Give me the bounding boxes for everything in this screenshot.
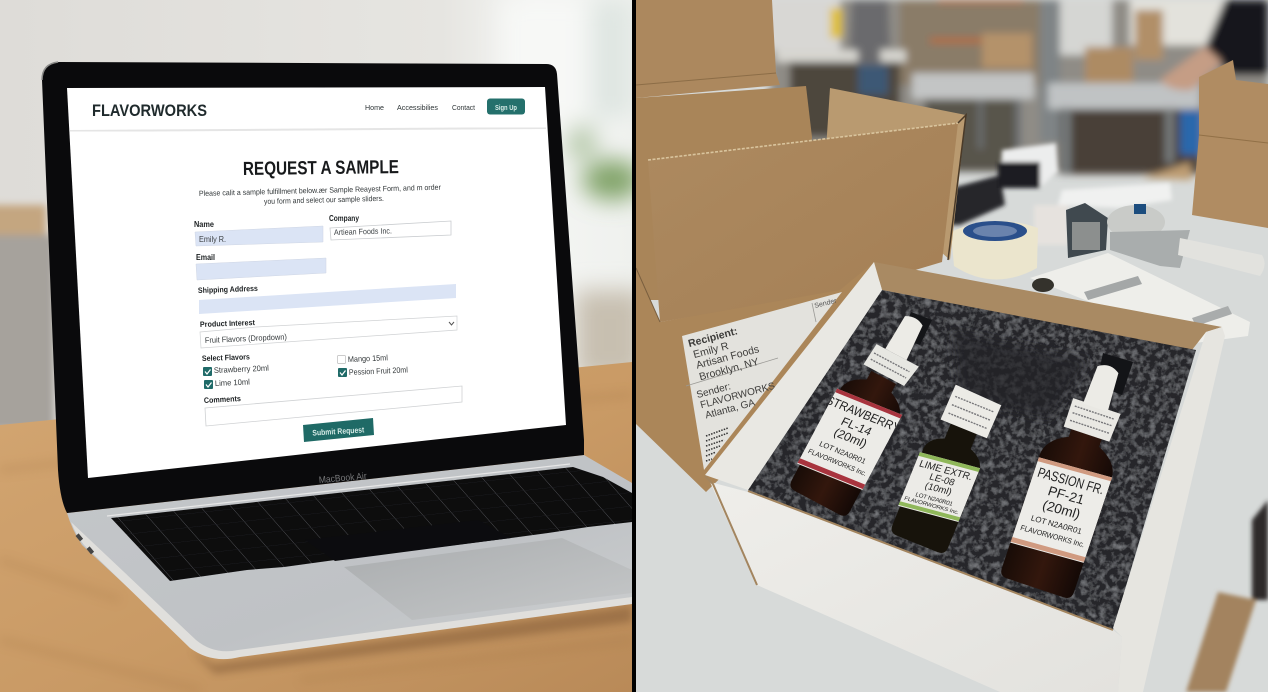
front face [710,482,1122,692]
warehouse background [636,0,1268,692]
comments field [204,386,462,426]
nav links: Home [365,103,384,112]
open carton with front flap [636,115,966,492]
product interest dropdown [200,316,457,348]
label: strawberry [793,387,907,492]
label: lime extract: LOT N2A0R01 [914,492,954,508]
laptop lid [42,62,584,513]
comments field: Comments [204,394,242,405]
shipping address field: Shipping Address [198,284,259,295]
tan board edges [705,476,1113,630]
label sender block [695,370,779,422]
label: passion fruit: PF-21 [1046,483,1086,507]
select flavors checklist [202,352,408,389]
label recipient block: Emily R [692,340,730,361]
center divider [632,0,636,692]
label: passion fruit: LOT N2A0R01 [1030,514,1084,536]
label: passion fruit: FLAVORWORKS Inc. [1019,523,1086,549]
checkbox: mango: Mango 15ml [348,353,388,364]
company field: Artiean Foods Inc. [334,226,392,237]
label recipient block [687,321,764,384]
background wall and window [0,0,645,440]
back cardboard boxes [636,0,966,300]
header divider [70,128,546,131]
bottle: strawberry [782,299,949,521]
label recipient block: Artisan Foods [695,343,760,372]
name field: Name [194,220,215,229]
foam cutout: passion fruit [1096,353,1133,395]
intro text [199,183,441,206]
bottle: lime extract [888,382,1006,555]
box inner tan back wall [874,262,1222,350]
shipping address field [198,284,456,314]
table corner items at lower right [1186,500,1268,692]
label: strawberry: LOT N2A0R01 [818,439,868,466]
label: strawberry: STRAWBERRY [823,393,903,435]
checkbox: passion fruit: Pession Fruit 20ml [349,365,408,377]
label: lime extract: LIME EXTR. [917,459,974,483]
packing supplies on table [948,143,1265,345]
label: lime extract: LE-08 [928,472,956,488]
label sender block: Atlanta, GA [704,397,757,421]
label: passion fruit: (20ml) [1041,497,1082,522]
sign up button: Sign Up [495,103,517,112]
tape roll [951,221,1038,280]
panel: laptop photo [0,0,645,692]
left inner wall [705,262,882,490]
foam cutout: strawberry [900,312,932,345]
label: strawberry: (20ml) [831,425,869,451]
sign up button [487,98,525,114]
foam dark centre patch [950,330,1090,420]
nav links [366,104,475,110]
heading: request a sample: REQUEST A SAMPLE [243,157,399,180]
label tiny sender tag: Sender [814,298,838,310]
checkbox: mango [337,354,388,364]
nav links: Contact [452,103,476,112]
label: lime extract [898,452,980,522]
intro text: Please calit a sample fulfillment below.ær Sample Reayest Form, and m order [199,183,441,198]
select flavors checklist: Select Flavors [202,352,251,363]
submit request button [303,418,374,442]
submit request button: Submit Request [312,425,365,438]
intro text: you form and select our sample sliders. [264,194,384,206]
label barcode [706,428,728,461]
checkbox: strawberry: Strawberry 20ml [214,364,269,375]
wood grain [0,395,632,690]
company field: Company [329,214,360,223]
bottle: passion fruit [999,354,1145,600]
shipping label on carton [682,292,842,470]
tape dispenser [1066,203,1265,276]
email field [196,253,326,280]
checkbox: lime [204,378,250,389]
label: lime extract: (10ml) [923,481,953,498]
email field: Email [196,253,215,262]
laptop base [67,455,632,659]
product interest dropdown: Fruit Flavors (Dropdown) [205,332,287,345]
panel: packed samples photo [636,0,1268,692]
label recipient block: Recipient: [687,325,739,350]
right wall [1113,327,1225,692]
lid silver edge [42,62,58,80]
keyboard [107,464,632,581]
label sender block: Sender: [695,381,732,401]
checkbox: passion fruit [338,366,408,377]
name field [194,220,323,246]
logo: FLAVORWORKS: FLAVORWORKS [92,102,207,120]
label sender block: FLAVORWORKS [699,381,777,411]
screen: sample request form [67,87,566,478]
label: passion fruit [1010,457,1112,563]
trackpad [344,538,632,620]
shipping label roll with barcodes [1030,253,1250,345]
laptop shadow [190,606,632,674]
company field [329,214,451,240]
white sample box [705,262,1225,692]
wooden table [0,362,632,692]
label: lime extract: FLAVORWORKS Inc. [903,496,960,516]
label: strawberry: FLAVORWORKS Inc. [806,448,868,478]
name field: Emily R. [199,235,226,244]
hinge brand: MacBook Air: MacBook Air [318,471,367,486]
far right cardboard box [1192,60,1268,228]
product interest dropdown: Product Interest [200,318,255,329]
label: passion fruit: PASSION FR. [1036,464,1106,497]
label: strawberry: FL-14 [839,414,875,439]
foam insert [748,290,1196,630]
nav links: Accessibilies [397,103,438,112]
label recipient block: Brooklyn, NY [698,356,760,383]
checkbox: lime: Lime 10ml [215,377,250,388]
